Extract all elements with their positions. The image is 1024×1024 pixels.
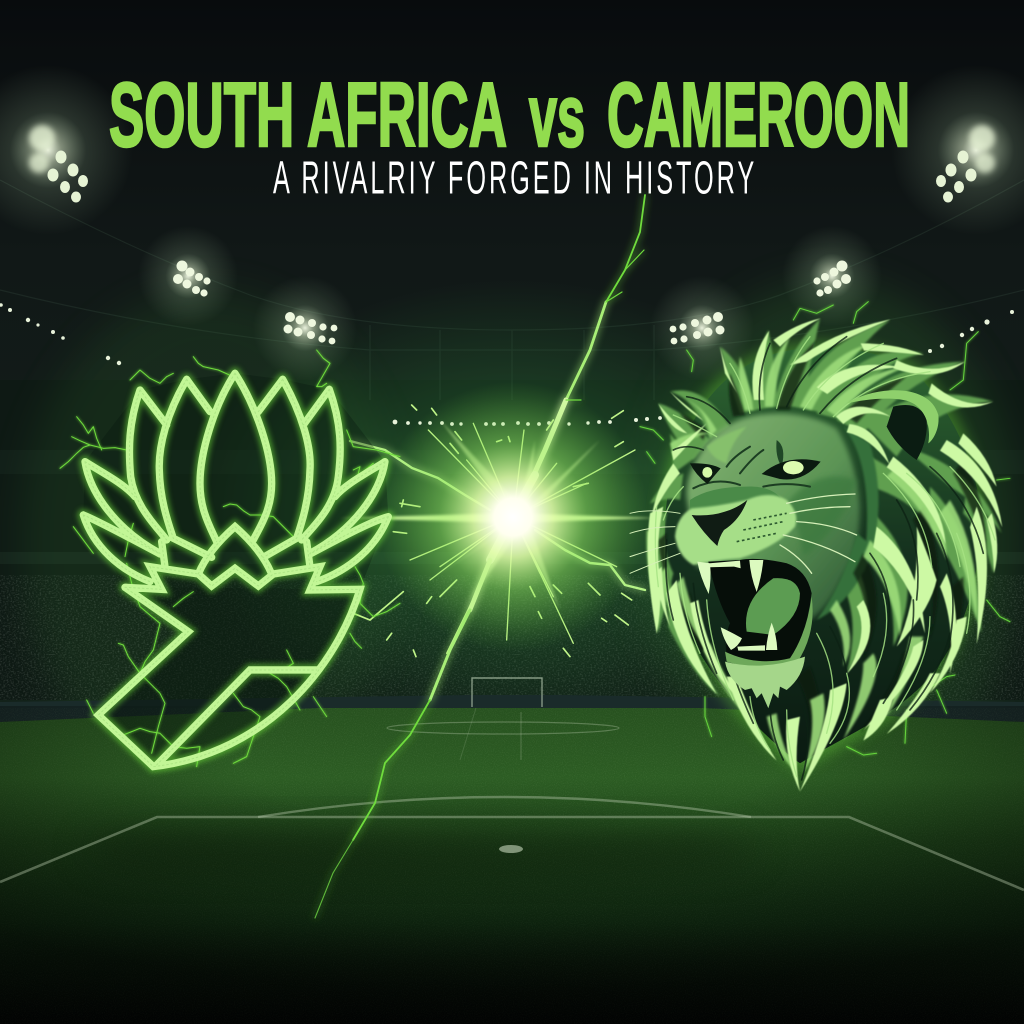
emblem: South Africa protea (60, 350, 400, 767)
fine fur: dark (666, 337, 983, 780)
pitch lines (0, 708, 1024, 955)
title: vs (529, 66, 585, 165)
floodlight cluster: upper right (782, 226, 882, 326)
left eye (690, 463, 721, 484)
lion mane base (665, 347, 980, 763)
lightning bolt: lower (315, 522, 510, 918)
mane over cheek (817, 427, 879, 620)
subtitle: A RIVALRIY FORGED IN HISTORY (273, 151, 754, 203)
muzzle (675, 495, 796, 565)
whisker dots (737, 513, 787, 542)
mane strands: shadow (658, 340, 987, 767)
open mouth (708, 559, 812, 666)
floodlight cluster: far right (891, 65, 1024, 235)
perimeter wall (0, 695, 1024, 722)
whiskers (630, 494, 857, 573)
football pitch (0, 678, 1024, 1024)
penalty spot (499, 845, 523, 853)
emblem stippled core (83, 373, 388, 767)
mane strands: light (646, 337, 977, 773)
emblem outline (83, 373, 388, 767)
lion lightning arcs (640, 302, 1010, 755)
floodlight cluster: centre left (253, 276, 357, 380)
forehead shading (776, 440, 783, 467)
floodlight cluster: far left (0, 65, 133, 235)
teeth (697, 560, 777, 651)
lion glow (665, 347, 980, 763)
side arc: towards lion (535, 530, 645, 590)
right eye (762, 459, 821, 480)
starburst rays and sparks (353, 405, 635, 657)
tongue (746, 578, 800, 635)
lower lip (725, 597, 813, 668)
lion face (687, 413, 860, 620)
fine fur: light (655, 337, 995, 777)
emblem: Cameroon lion (630, 302, 1010, 792)
emblem lightning arcs (60, 350, 400, 767)
title: SOUTH AFRICA (109, 65, 507, 166)
goal (472, 678, 542, 707)
floodlight cluster: upper left (138, 226, 238, 326)
stands crowd (0, 380, 1024, 700)
emblem dark fill (83, 373, 388, 767)
tapered glow rays (430, 420, 610, 610)
mane masses: mid tone (650, 318, 1002, 697)
small lights row (0, 303, 1014, 426)
emblem outer glow (83, 373, 388, 767)
clash energy burst (315, 195, 655, 918)
stadium roof (0, 180, 1024, 400)
snout ridge (690, 487, 785, 513)
beard (725, 657, 805, 708)
lightning bolt: upper (513, 195, 645, 515)
side arc: towards protea (350, 441, 490, 510)
mane strands: bright (648, 318, 1002, 792)
nose (692, 500, 747, 546)
green energy aura (192, 280, 832, 750)
floodlight cluster: centre right (650, 276, 754, 380)
face wrinkles (693, 447, 810, 497)
floodlights (0, 65, 1024, 426)
ear (847, 390, 939, 460)
central flash (378, 382, 648, 652)
horizontal beam (340, 513, 655, 523)
